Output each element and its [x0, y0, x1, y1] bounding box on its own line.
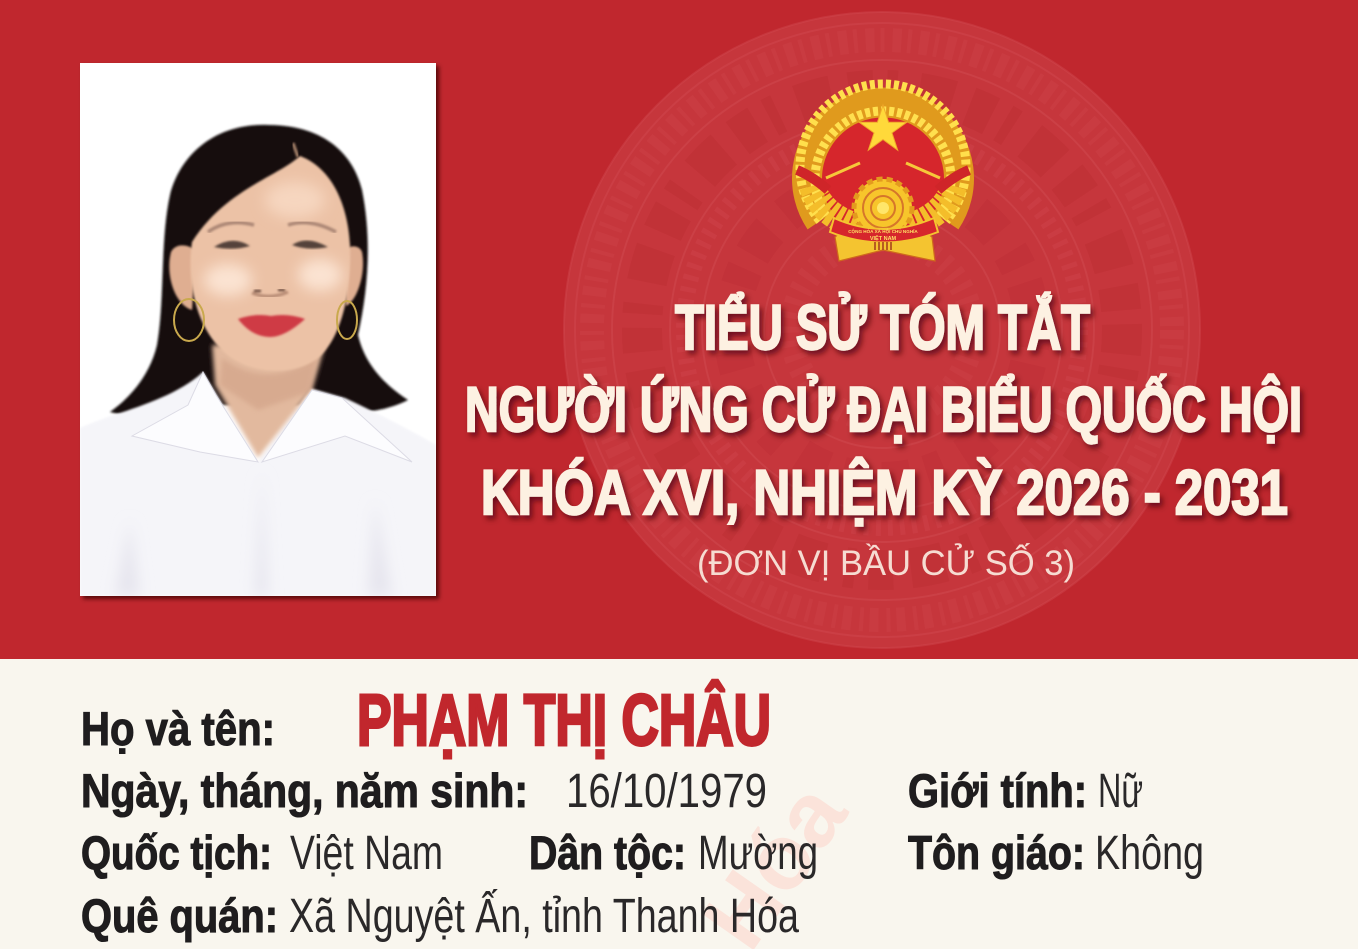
field: nationality: Quốc tịch:: [81, 826, 272, 879]
title: TIỂU SỬ TÓM TẮT: [675, 292, 1090, 363]
field: nationality: Việt Nam: [290, 827, 443, 880]
field: gender: Nữ: [1098, 765, 1143, 818]
portrait: shirt: [80, 372, 436, 596]
info panel background: [0, 659, 1358, 949]
emblem gear: [854, 179, 912, 237]
emblem wheat stalks: [826, 163, 940, 178]
portrait: ears: [169, 245, 363, 310]
photo frame: [80, 63, 436, 596]
portrait: forehead part line: [293, 143, 298, 157]
portrait: eyes: [214, 240, 328, 249]
portrait: shirt shadows: [118, 540, 389, 596]
field: nationality: [81, 826, 443, 880]
red header background: [0, 0, 1358, 659]
portrait: neck: [212, 345, 325, 458]
emblem banner: [830, 218, 938, 250]
field: hometown: Quê quán:: [81, 889, 278, 942]
portrait: neck shadow: [220, 361, 316, 409]
field: religion: Tôn giáo:: [908, 826, 1085, 879]
field: ethnicity: Dân tộc:: [529, 826, 686, 879]
emblem banner: CỘNG HÒA XÃ HỘI CHỦ NGHĨA: [848, 227, 918, 234]
portrait: brows: [208, 223, 336, 232]
field: ethnicity: [529, 826, 818, 880]
emblem star: [859, 105, 907, 150]
portrait: collar: [132, 372, 412, 462]
emblem red disc: [819, 113, 947, 241]
field: date of birth: Ngày, tháng, năm sinh:: [81, 764, 528, 817]
title: [465, 292, 1302, 528]
portrait: lips: [238, 315, 305, 337]
emblem banner: VIỆT NAM: [870, 234, 897, 242]
field: ethnicity: Mường: [698, 827, 818, 880]
portrait: face: [190, 156, 350, 371]
field: religion: Không: [1095, 827, 1204, 880]
portrait: earrings: [174, 299, 357, 341]
emblem base star points: [835, 226, 935, 261]
field: full name: Họ và tên:: [81, 702, 275, 755]
field: hometown: [81, 889, 799, 943]
field: full name: PHẠM THỊ CHÂU: [357, 680, 771, 761]
subtitle: (ĐƠN VỊ BẦU CỬ SỐ 3): [697, 543, 1075, 583]
portrait: nose: [252, 290, 288, 296]
field: date of birth: 16/10/1979: [566, 765, 767, 818]
field: full name: [81, 680, 771, 761]
emblem wreath: [797, 84, 969, 226]
field: gender: Giới tính:: [908, 764, 1087, 817]
field: hometown: Xã Nguyệt Ấn, tỉnh Thanh Hóa: [289, 889, 799, 943]
bronze drum medallion: [564, 12, 1200, 648]
portrait: back hair: [110, 125, 408, 418]
emblem lower wheat sprays: [812, 186, 856, 226]
portrait: face highlights: [204, 182, 342, 296]
national emblem: [797, 84, 969, 261]
candidate portrait photo: [80, 63, 436, 596]
